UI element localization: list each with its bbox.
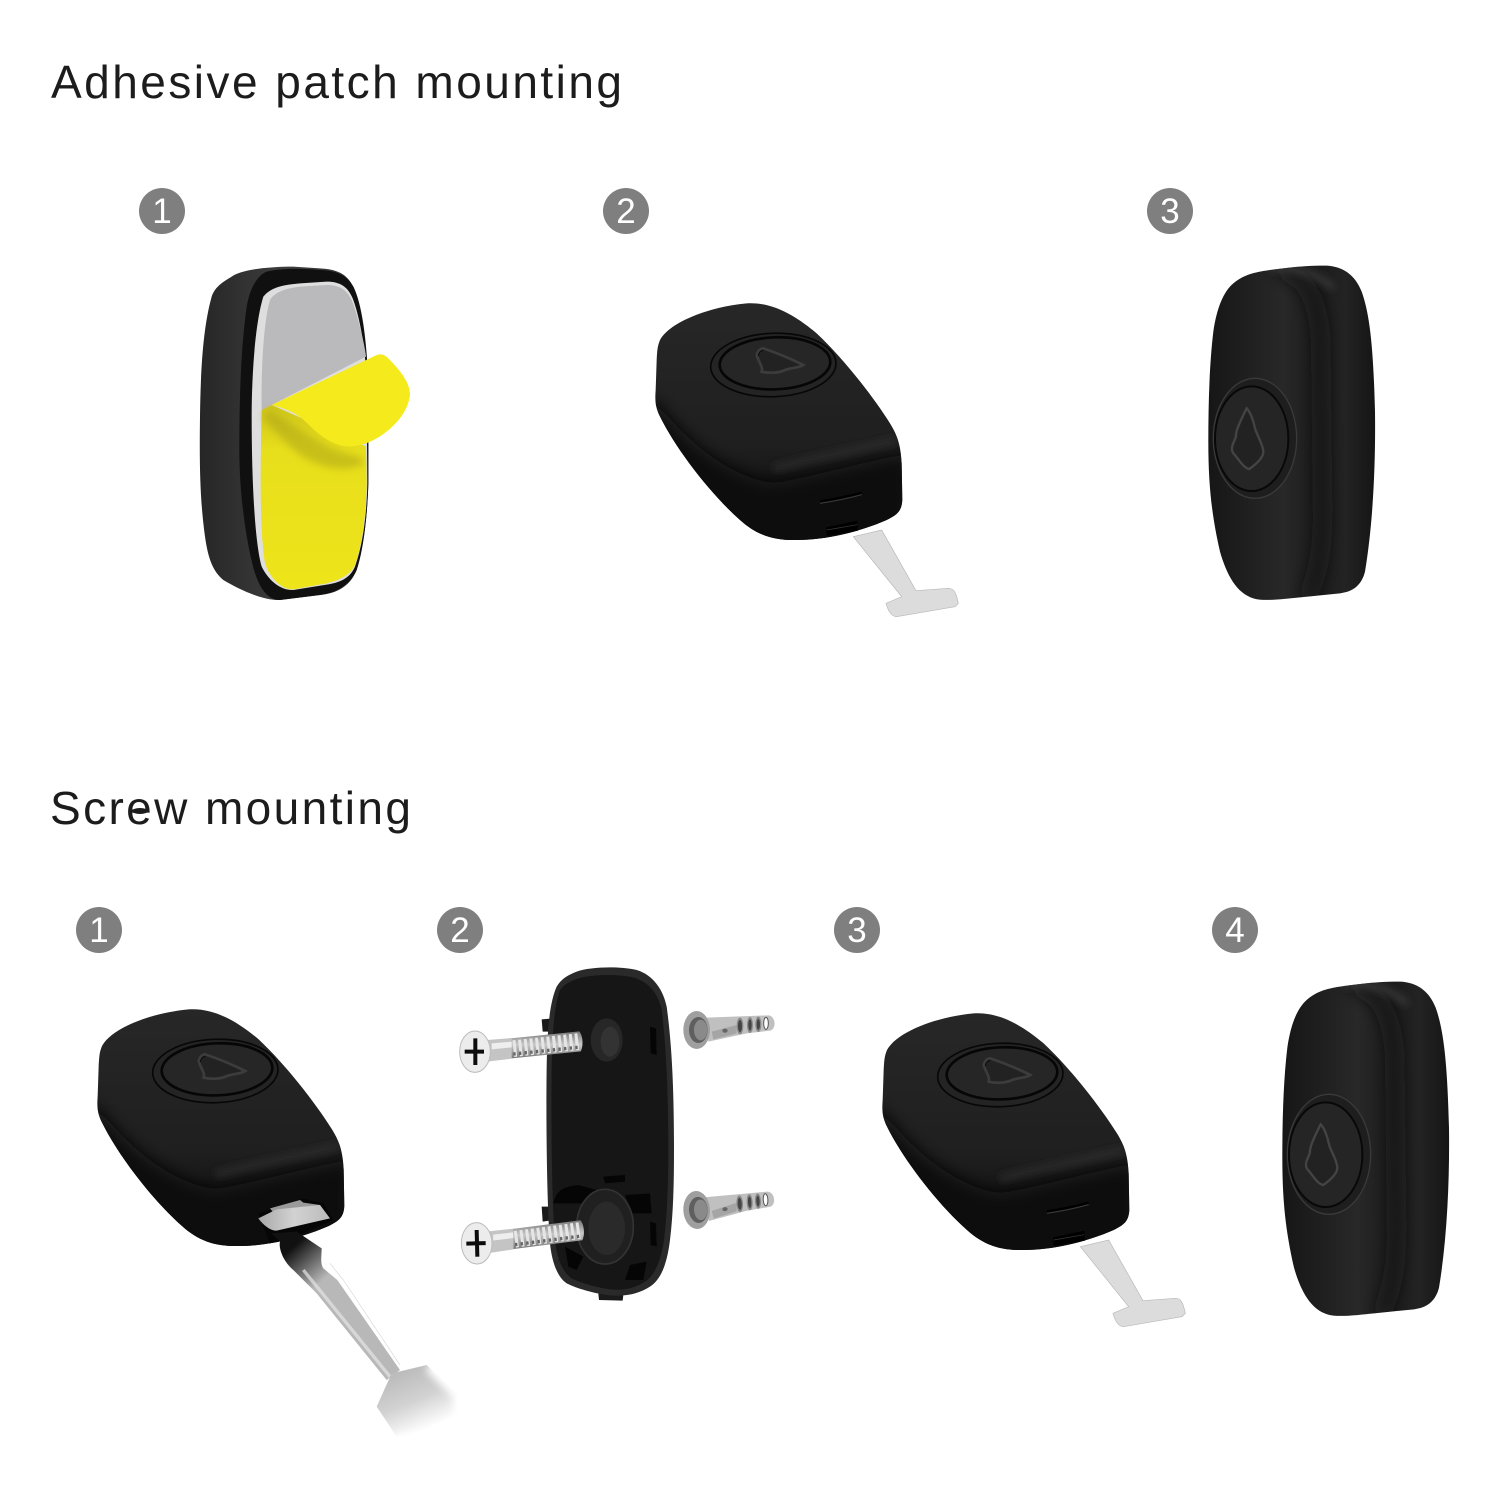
title: adhesive patch mounting: Adhesive patch mounting <box>51 56 622 108</box>
step badge 4 <box>1212 907 1258 953</box>
device front tilted with battery tab <box>650 303 958 617</box>
device front tilted with battery tab <box>877 1013 1185 1327</box>
step badge 1 <box>76 907 122 953</box>
step badge 1: 1 <box>152 192 172 231</box>
step badge 2: 2 <box>616 192 636 231</box>
device with screwdriver prying tab <box>92 1009 460 1442</box>
step badge 1 <box>139 188 185 234</box>
title: screw mounting: Screw mounting <box>50 782 411 834</box>
step badge 2: 2 <box>450 911 470 950</box>
device front upright <box>1282 982 1449 1316</box>
step badge 3 <box>1147 188 1193 234</box>
step badge 3: 3 <box>1160 192 1180 231</box>
step badge 2 <box>603 188 649 234</box>
step badge 3: 3 <box>847 911 867 950</box>
step badge 3 <box>834 907 880 953</box>
step badge 1: 1 <box>89 911 109 950</box>
device back with yellow adhesive patch peeling <box>200 267 410 600</box>
device front upright <box>1208 266 1375 600</box>
step badge 4: 4 <box>1225 911 1245 950</box>
back plate with screws and anchors <box>460 967 775 1301</box>
step badge 2 <box>437 907 483 953</box>
